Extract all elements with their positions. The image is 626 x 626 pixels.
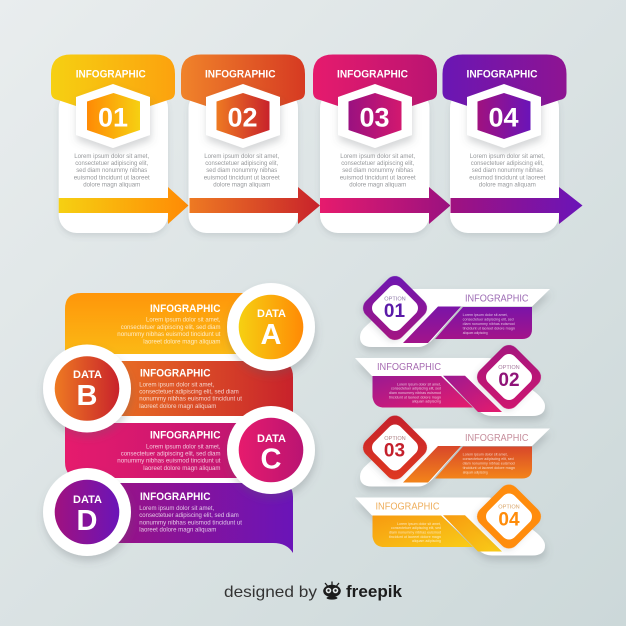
text block: tincidunt ut laoreet dolore magn [463, 326, 515, 330]
text block: dolore magn aliquam [213, 182, 270, 188]
badge: data B [43, 344, 131, 432]
number: 04 [488, 102, 519, 132]
text block: Lorem ipsum dolor sit amet, [463, 313, 508, 317]
panel: data D band with tail: laoreet dolore magn aliquam [139, 527, 216, 534]
panel: option 04 [355, 480, 545, 556]
text block: Lorem ipsum dolor sit amet, [463, 452, 508, 456]
text block: tincidunt ut laoreet dolore magn [463, 466, 515, 470]
arrow [190, 187, 320, 224]
text block [463, 452, 515, 474]
panel: data D band with tail: consectetuer adipiscing elit, sed diam [139, 512, 239, 519]
text block: euismod tincidunt ut laoreet [74, 174, 150, 181]
icon: white hexagon [467, 84, 541, 148]
option diamond: 04 [498, 510, 520, 530]
icon: number hexagon [348, 93, 402, 139]
icon: white hexagon [338, 84, 412, 148]
text block: consectetuer adipiscing elit, sed [391, 387, 441, 391]
header tab [181, 54, 305, 106]
option diamond: 02 [498, 370, 520, 391]
panel: option 01 [359, 272, 550, 347]
text block: tincidunt ut laoreet dolore magn [389, 535, 441, 539]
panel: data A band: INFOGRAPHIC [150, 303, 221, 315]
text block: consectetuer adipiscing elit, [75, 160, 148, 167]
text block: sed diam nonummy nibhas [206, 167, 278, 174]
badge: data C [227, 406, 315, 494]
text block: consectetuer adipiscing elit, [471, 160, 544, 167]
white ribbon [360, 289, 550, 347]
panel: data A band: Lorem ipsum dolor sit amet, [146, 317, 221, 324]
badge: data D: DATA [73, 494, 102, 506]
card body [450, 90, 559, 233]
text block: dolore magn aliquam [479, 182, 536, 188]
option diamond: 03 [384, 440, 405, 461]
heading: INFOGRAPHIC [376, 500, 440, 512]
text block [463, 313, 515, 335]
text block: Lorem ipsum dolor sit amet, [74, 153, 149, 160]
text block [469, 153, 545, 188]
text block: euismod tincidunt ut laoreet [340, 174, 416, 181]
text block: Lorem ipsum dolor sit amet, [340, 153, 415, 160]
option diamond: OPTION [384, 297, 406, 303]
arrow [450, 187, 582, 224]
text block: dolore magn aliquam [349, 182, 406, 188]
text panel [372, 516, 473, 547]
heading: INFOGRAPHIC [465, 432, 529, 444]
arrow [59, 187, 189, 224]
text block: consectetuer adipiscing elit, sed [463, 318, 514, 322]
header tab [313, 54, 437, 106]
badge: data A: DATA [257, 308, 286, 320]
slanted stripe [443, 376, 502, 412]
slanted stripe [403, 306, 461, 343]
text block [389, 382, 441, 404]
card body [188, 90, 298, 233]
footer credit: designed by [224, 584, 317, 601]
slanted stripe [443, 515, 502, 552]
badge: data C: DATA [257, 433, 286, 445]
card body [320, 90, 430, 233]
text block: consectetuer adipiscing elit, [341, 160, 414, 167]
badge: data B: DATA [73, 369, 102, 381]
text block: diam nonummy nibhas euismod [389, 391, 441, 395]
badge: data A: A [261, 319, 282, 351]
heading: INFOGRAPHIC [466, 68, 538, 80]
panel: data D band with tail [87, 483, 293, 553]
text block: euismod tincidunt ut laoreet [204, 174, 280, 181]
option diamond: 01 [384, 301, 405, 322]
text block: aliquam adipiscing [463, 331, 488, 335]
panel: data C band: laoreet dolore magn aliquam [143, 465, 220, 472]
heading: INFOGRAPHIC [377, 361, 441, 373]
text block: consectetuer adipiscing elit, sed [391, 526, 441, 530]
text block: Lorem ipsum dolor sit amet, [204, 153, 279, 160]
text block [204, 153, 280, 188]
icon: freepik robot [323, 582, 341, 600]
badge: data A [227, 283, 315, 371]
text block: aliquam adipiscing [412, 539, 441, 543]
text block: Lorem ipsum dolor sit amet, [397, 382, 441, 386]
heading: INFOGRAPHIC [337, 68, 408, 80]
panel: data D band with tail: Lorem ipsum dolor sit amet, [139, 505, 214, 512]
text block: diam nonummy nibhas euismod [463, 462, 515, 466]
slanted stripe [403, 446, 461, 482]
text block: consectetuer adipiscing elit, [205, 160, 278, 167]
option diamond [473, 480, 545, 553]
icon: white hexagon [206, 84, 280, 148]
text block: sed diam nonummy nibhas [472, 167, 543, 174]
number: 03 [359, 102, 390, 132]
text block [74, 153, 150, 188]
option diamond [359, 272, 431, 344]
text block [389, 522, 441, 543]
heading: INFOGRAPHIC [205, 68, 276, 80]
footer credit: freepik [346, 582, 403, 601]
panel: step 02 [181, 54, 320, 233]
option diamond: OPTION [498, 365, 520, 371]
text block: aliquam adipiscing [412, 400, 441, 404]
text block: euismod tincidunt ut laoreet [469, 174, 545, 181]
text block: sed diam nonummy nibhas [76, 167, 148, 174]
badge: data C: C [261, 444, 282, 476]
text panel [372, 376, 473, 408]
white ribbon [355, 498, 545, 556]
panel: data C band: Lorem ipsum dolor sit amet, [146, 443, 221, 450]
text block: tincidunt ut laoreet dolore magn [389, 395, 441, 399]
header tab [51, 54, 175, 106]
option diamond [359, 411, 431, 484]
icon: number hexagon [216, 93, 270, 139]
panel: data stack [43, 283, 315, 556]
icon: number hexagon [478, 93, 530, 139]
text block: aliquam adipiscing [463, 470, 488, 474]
panel: data C band: nonummy nibhas euismod tincidunt ut [117, 458, 221, 464]
text block: consectetuer adipiscing elit, sed [463, 457, 514, 461]
text block: dolore magn aliquam [83, 182, 140, 188]
option diamond [473, 341, 545, 413]
icon: white hexagon [76, 84, 150, 148]
badge: data B: B [77, 380, 97, 412]
option diamond: OPTION [384, 436, 406, 442]
panel: step 04 [442, 54, 582, 233]
card body [59, 90, 168, 233]
badge: data D: D [77, 505, 97, 537]
panel: option 02 [355, 341, 545, 416]
text block [340, 153, 416, 188]
white ribbon [355, 358, 545, 416]
panel: step 03 [313, 54, 450, 233]
panel: data A band [65, 293, 272, 354]
panel: data B band [87, 361, 293, 416]
white separators [80, 352, 270, 485]
panel: data A band: laoreet dolore magn aliquam [143, 338, 220, 345]
panel: data D band with tail: nonummy nibhas euismod tincidunt ut [139, 519, 242, 526]
heading: INFOGRAPHIC [76, 68, 146, 80]
panel: data B band: laoreet dolore magn aliquam [139, 403, 216, 410]
text panel [435, 446, 532, 478]
panel: step 01 [51, 54, 188, 233]
footer credit [224, 582, 403, 601]
panel: data B band: consectetuer adipiscing elit, sed diam [139, 389, 239, 396]
text block: diam nonummy nibhas euismod [389, 530, 441, 534]
option diamond: OPTION [498, 504, 520, 510]
header tab [442, 54, 566, 106]
icon: number hexagon [87, 93, 140, 139]
panel: data D band with tail: INFOGRAPHIC [140, 491, 211, 503]
number: 01 [98, 102, 128, 132]
panel: data B band: Lorem ipsum dolor sit amet, [139, 381, 214, 388]
panel: data C band: consectetuer adipiscing elit, sed diam [121, 450, 220, 457]
panel: data B band: INFOGRAPHIC [140, 368, 211, 380]
panel: data C band [65, 423, 272, 478]
text block: Lorem ipsum dolor sit amet, [397, 522, 441, 526]
panel: option 03 [359, 411, 550, 486]
text block: sed diam nonummy nibhas [342, 167, 414, 174]
panel: data B band: nonummy nibhas euismod tincidunt ut [139, 396, 242, 403]
text panel [435, 307, 532, 339]
heading: INFOGRAPHIC [465, 293, 529, 305]
panel: data A band: consectetuer adipiscing elit, sed diam [121, 324, 220, 331]
number: 02 [227, 102, 258, 132]
white ribbon [360, 428, 550, 486]
text block: Lorem ipsum dolor sit amet, [470, 153, 545, 160]
text block: diam nonummy nibhas euismod [463, 322, 515, 326]
panel: data A band: nonummy nibhas euismod tincidunt ut [117, 331, 221, 338]
panel: data C band: INFOGRAPHIC [150, 430, 221, 442]
badge: data D [43, 468, 131, 556]
arrow [320, 187, 450, 224]
